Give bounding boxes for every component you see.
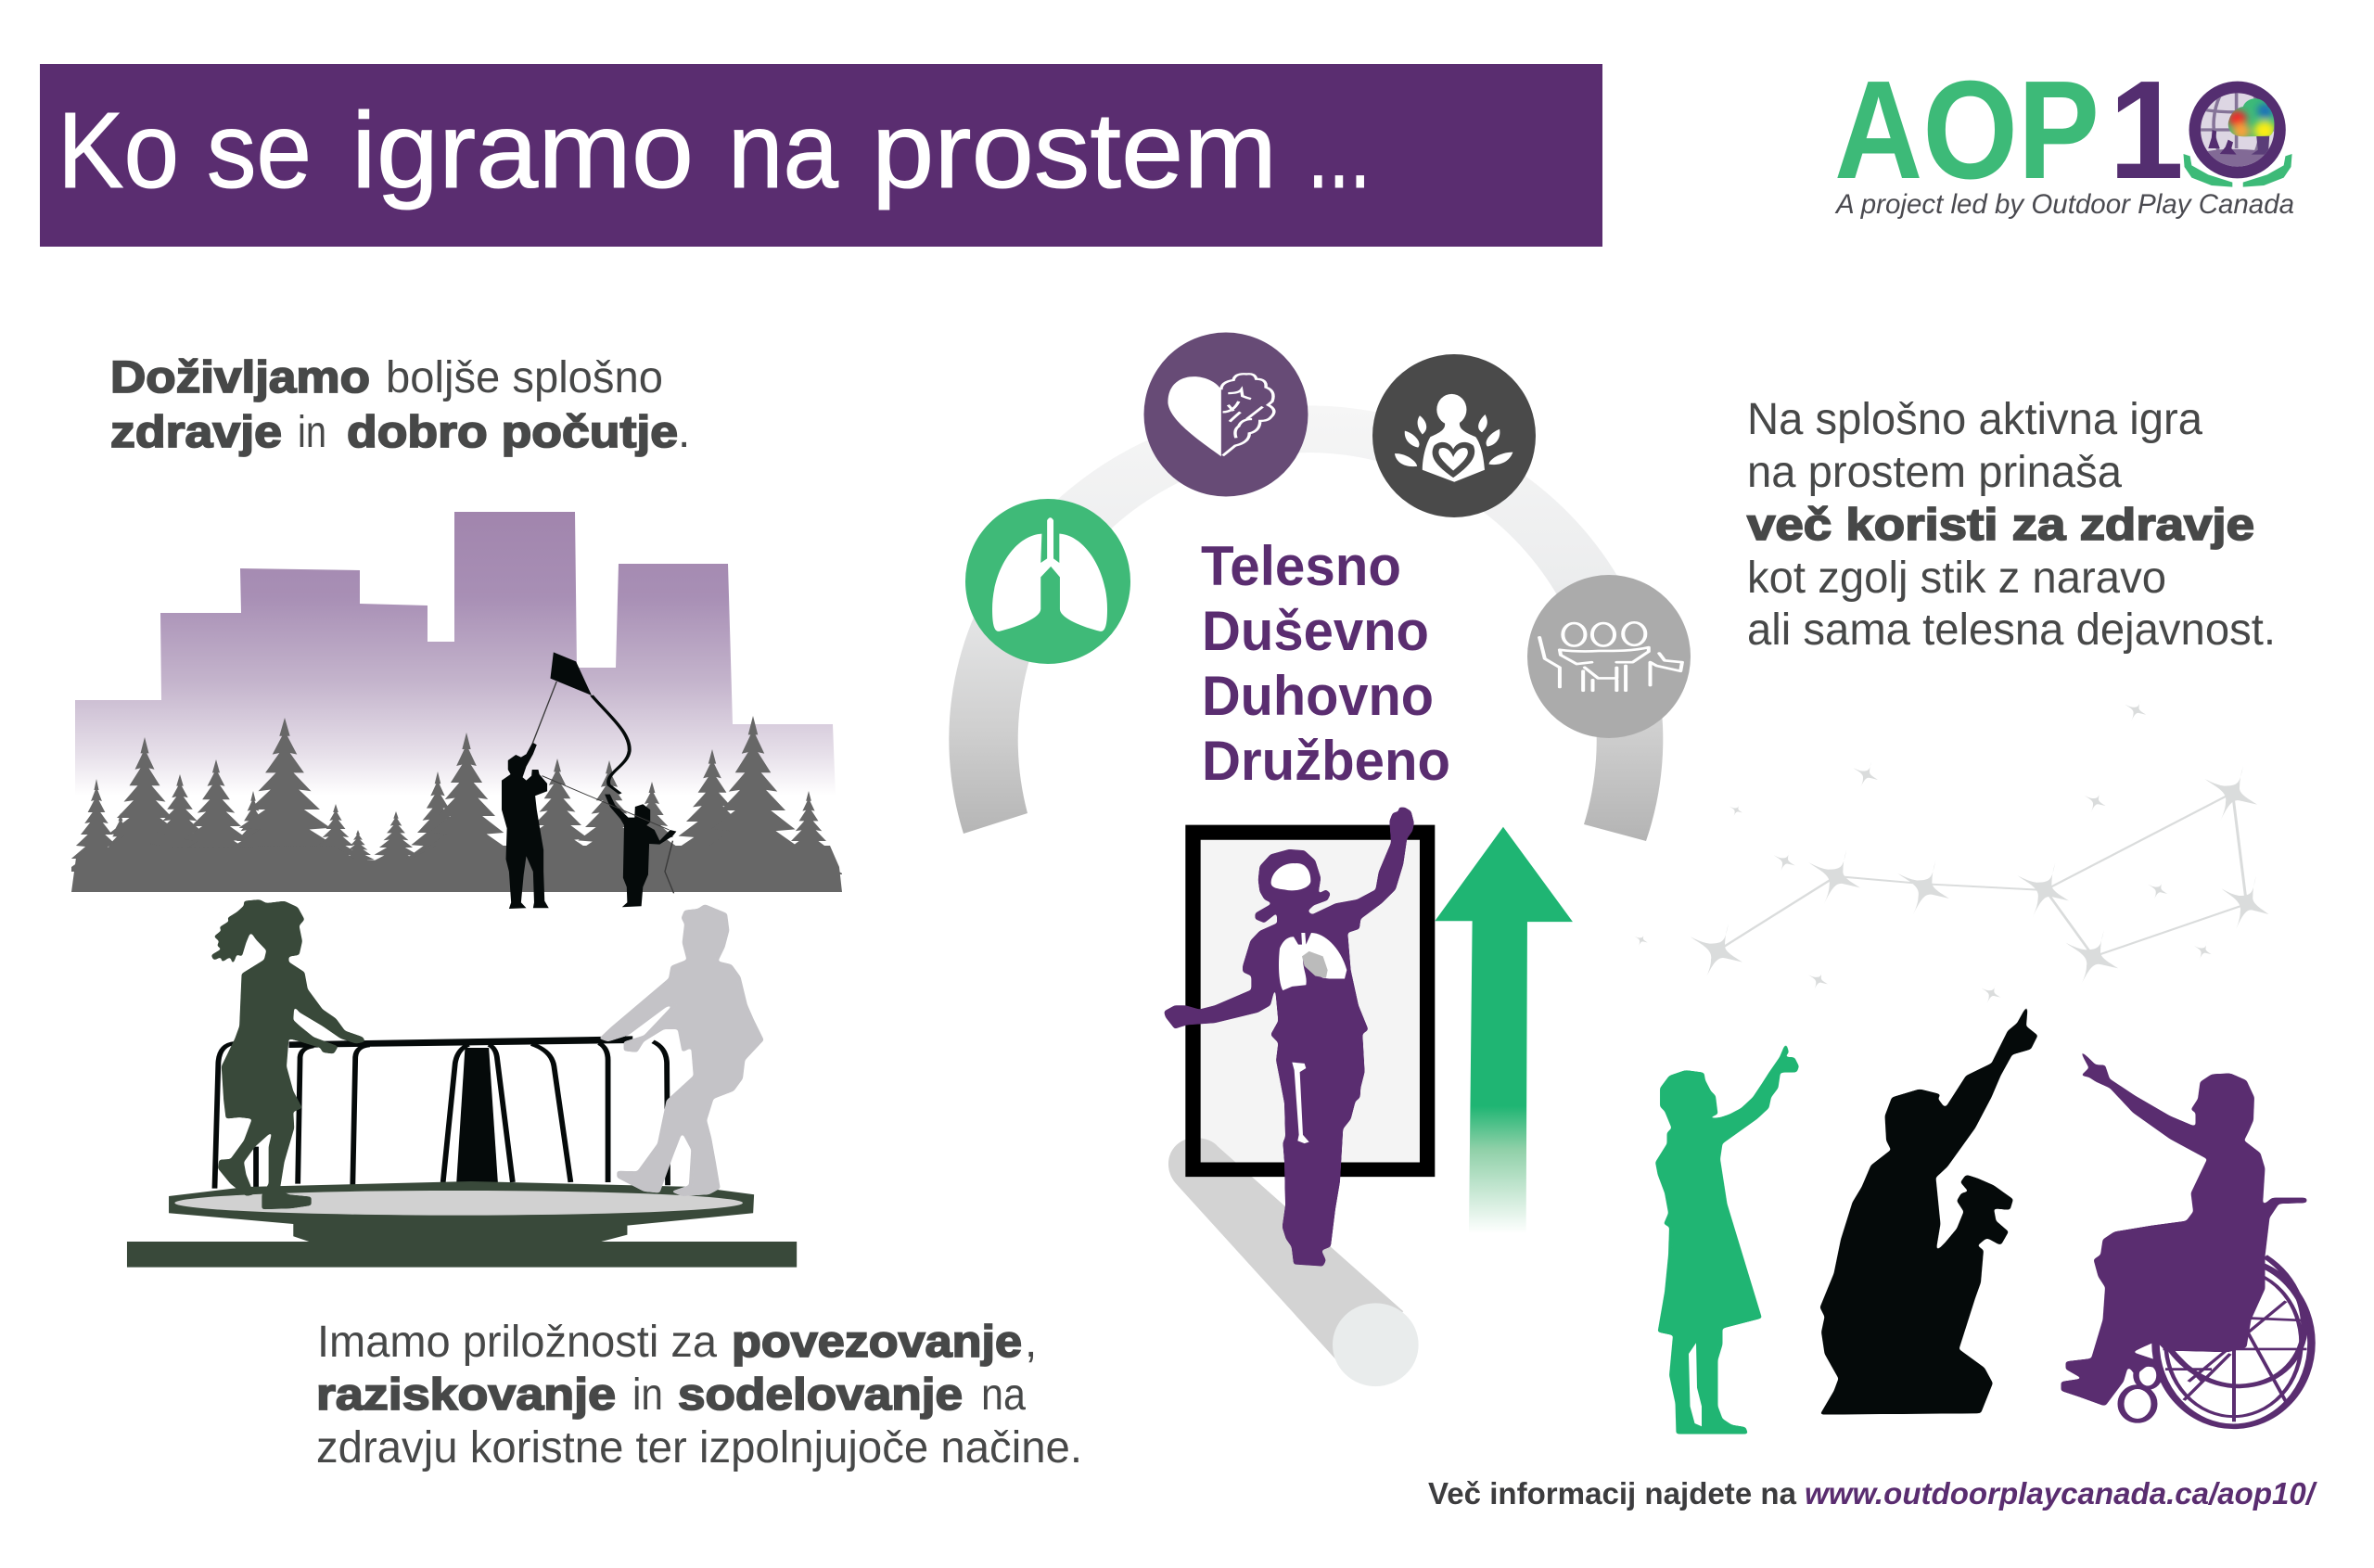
girl silhouette [211, 899, 365, 1209]
text block: more health benefits [1747, 395, 2276, 655]
text block: connecting, exploring, engaging: sodelovanje [678, 1370, 963, 1420]
icon: heart and brain, mental [1144, 332, 1308, 497]
heart [1302, 951, 1328, 978]
illustration: figure balancing on log in front of frame [1164, 808, 1435, 1386]
illustration: city skyline, forest and kite flyers [65, 512, 844, 909]
illustration: three people pointing at the stars [1655, 1003, 2311, 1434]
grey arc behind the four domains [949, 405, 1663, 841]
logo wordmark: AOP [1834, 51, 2100, 208]
footer: more information link: Več informacij najdete na [1428, 1476, 1797, 1511]
log [1168, 1138, 1419, 1386]
title: ... [1308, 90, 1371, 210]
footer: more information link [1428, 1476, 2318, 1511]
purple figure [1164, 808, 1414, 1267]
domains list: Duševno [1202, 600, 1429, 662]
frame border [1185, 825, 1435, 1177]
text block: overall health and wellbeing: boljše splošno [386, 353, 663, 402]
boy silhouette [599, 904, 764, 1196]
skyline [75, 512, 836, 797]
title: na [728, 90, 838, 210]
domains list: Telesno [1201, 535, 1401, 597]
text block: connecting, exploring, engaging [316, 1318, 1082, 1472]
text block: more health benefits: Na splošno aktivna igra [1747, 395, 2202, 444]
platform and base [127, 1181, 797, 1268]
text block: connecting, exploring, engaging: povezovanje [732, 1318, 1022, 1367]
forest [65, 716, 844, 892]
footer: more information link: www.outdoorplaycanada.ca/aop10/ [1805, 1476, 2318, 1511]
kite flyers [502, 652, 676, 909]
text block: overall health and wellbeing: Doživljamo [110, 353, 370, 402]
text block: overall health and wellbeing: zdravje [110, 408, 282, 457]
text block: connecting, exploring, engaging: raziskovanje [316, 1370, 616, 1420]
text block: connecting, exploring, engaging: , [1025, 1318, 1037, 1367]
text block: more health benefits: kot zgolj stik z naravo [1747, 554, 2166, 603]
title banner [40, 64, 1602, 247]
illustration: merry-go-round with two children [127, 899, 797, 1268]
brain [1271, 863, 1310, 890]
title: prostem [872, 90, 1277, 210]
domains list: Duhovno [1202, 665, 1434, 727]
logo tagline: A project led by Outdoor Play Canada [1834, 189, 2294, 220]
title: Ko se [57, 90, 312, 210]
text block: overall health and wellbeing [110, 353, 690, 457]
icon: person with heart and leaves, spiritual [1372, 354, 1536, 517]
text block: connecting, exploring, engaging: zdravju koristne ter izpolnjujoče načine. [316, 1423, 1082, 1472]
femur bone [1292, 1063, 1309, 1143]
kneeling man with binoculars [1819, 1003, 2038, 1415]
icon: group of people around table, social [1527, 575, 1691, 738]
logo wordmark: 1 [2109, 51, 2184, 208]
text block: connecting, exploring, engaging: Imamo priložnosti za [317, 1318, 717, 1367]
text block: overall health and wellbeing: in [298, 408, 326, 457]
lungs [1279, 933, 1347, 990]
arrow: upward green gradient [1435, 827, 1573, 1233]
woman in wheelchair [2061, 1048, 2311, 1426]
frame panel [1185, 825, 1435, 1177]
constellation of stars [1634, 699, 2268, 1003]
logo emblem: globe with tree and hands [2183, 82, 2292, 187]
text block: more health benefits: ali sama telesna dejavnost. [1747, 606, 2276, 655]
domains list [1201, 535, 1450, 792]
text block: connecting, exploring, engaging: na [981, 1370, 1026, 1420]
girl in dress pointing [1655, 1041, 1799, 1434]
text block: overall health and wellbeing: dobro počutje [347, 408, 678, 457]
domains list: Družbeno [1202, 730, 1450, 792]
text block: more health benefits: na prostem prinaša [1747, 448, 2122, 497]
text block: connecting, exploring, engaging: in [632, 1370, 663, 1420]
title: igramo [351, 90, 694, 210]
logo: AOP10 [1834, 80, 2293, 219]
text block: more health benefits: več koristi za zdravje [1747, 501, 2254, 550]
rails [214, 1036, 668, 1189]
title [57, 90, 1371, 210]
icon: lungs, physical [965, 499, 1130, 664]
text block: overall health and wellbeing: . [678, 408, 690, 457]
